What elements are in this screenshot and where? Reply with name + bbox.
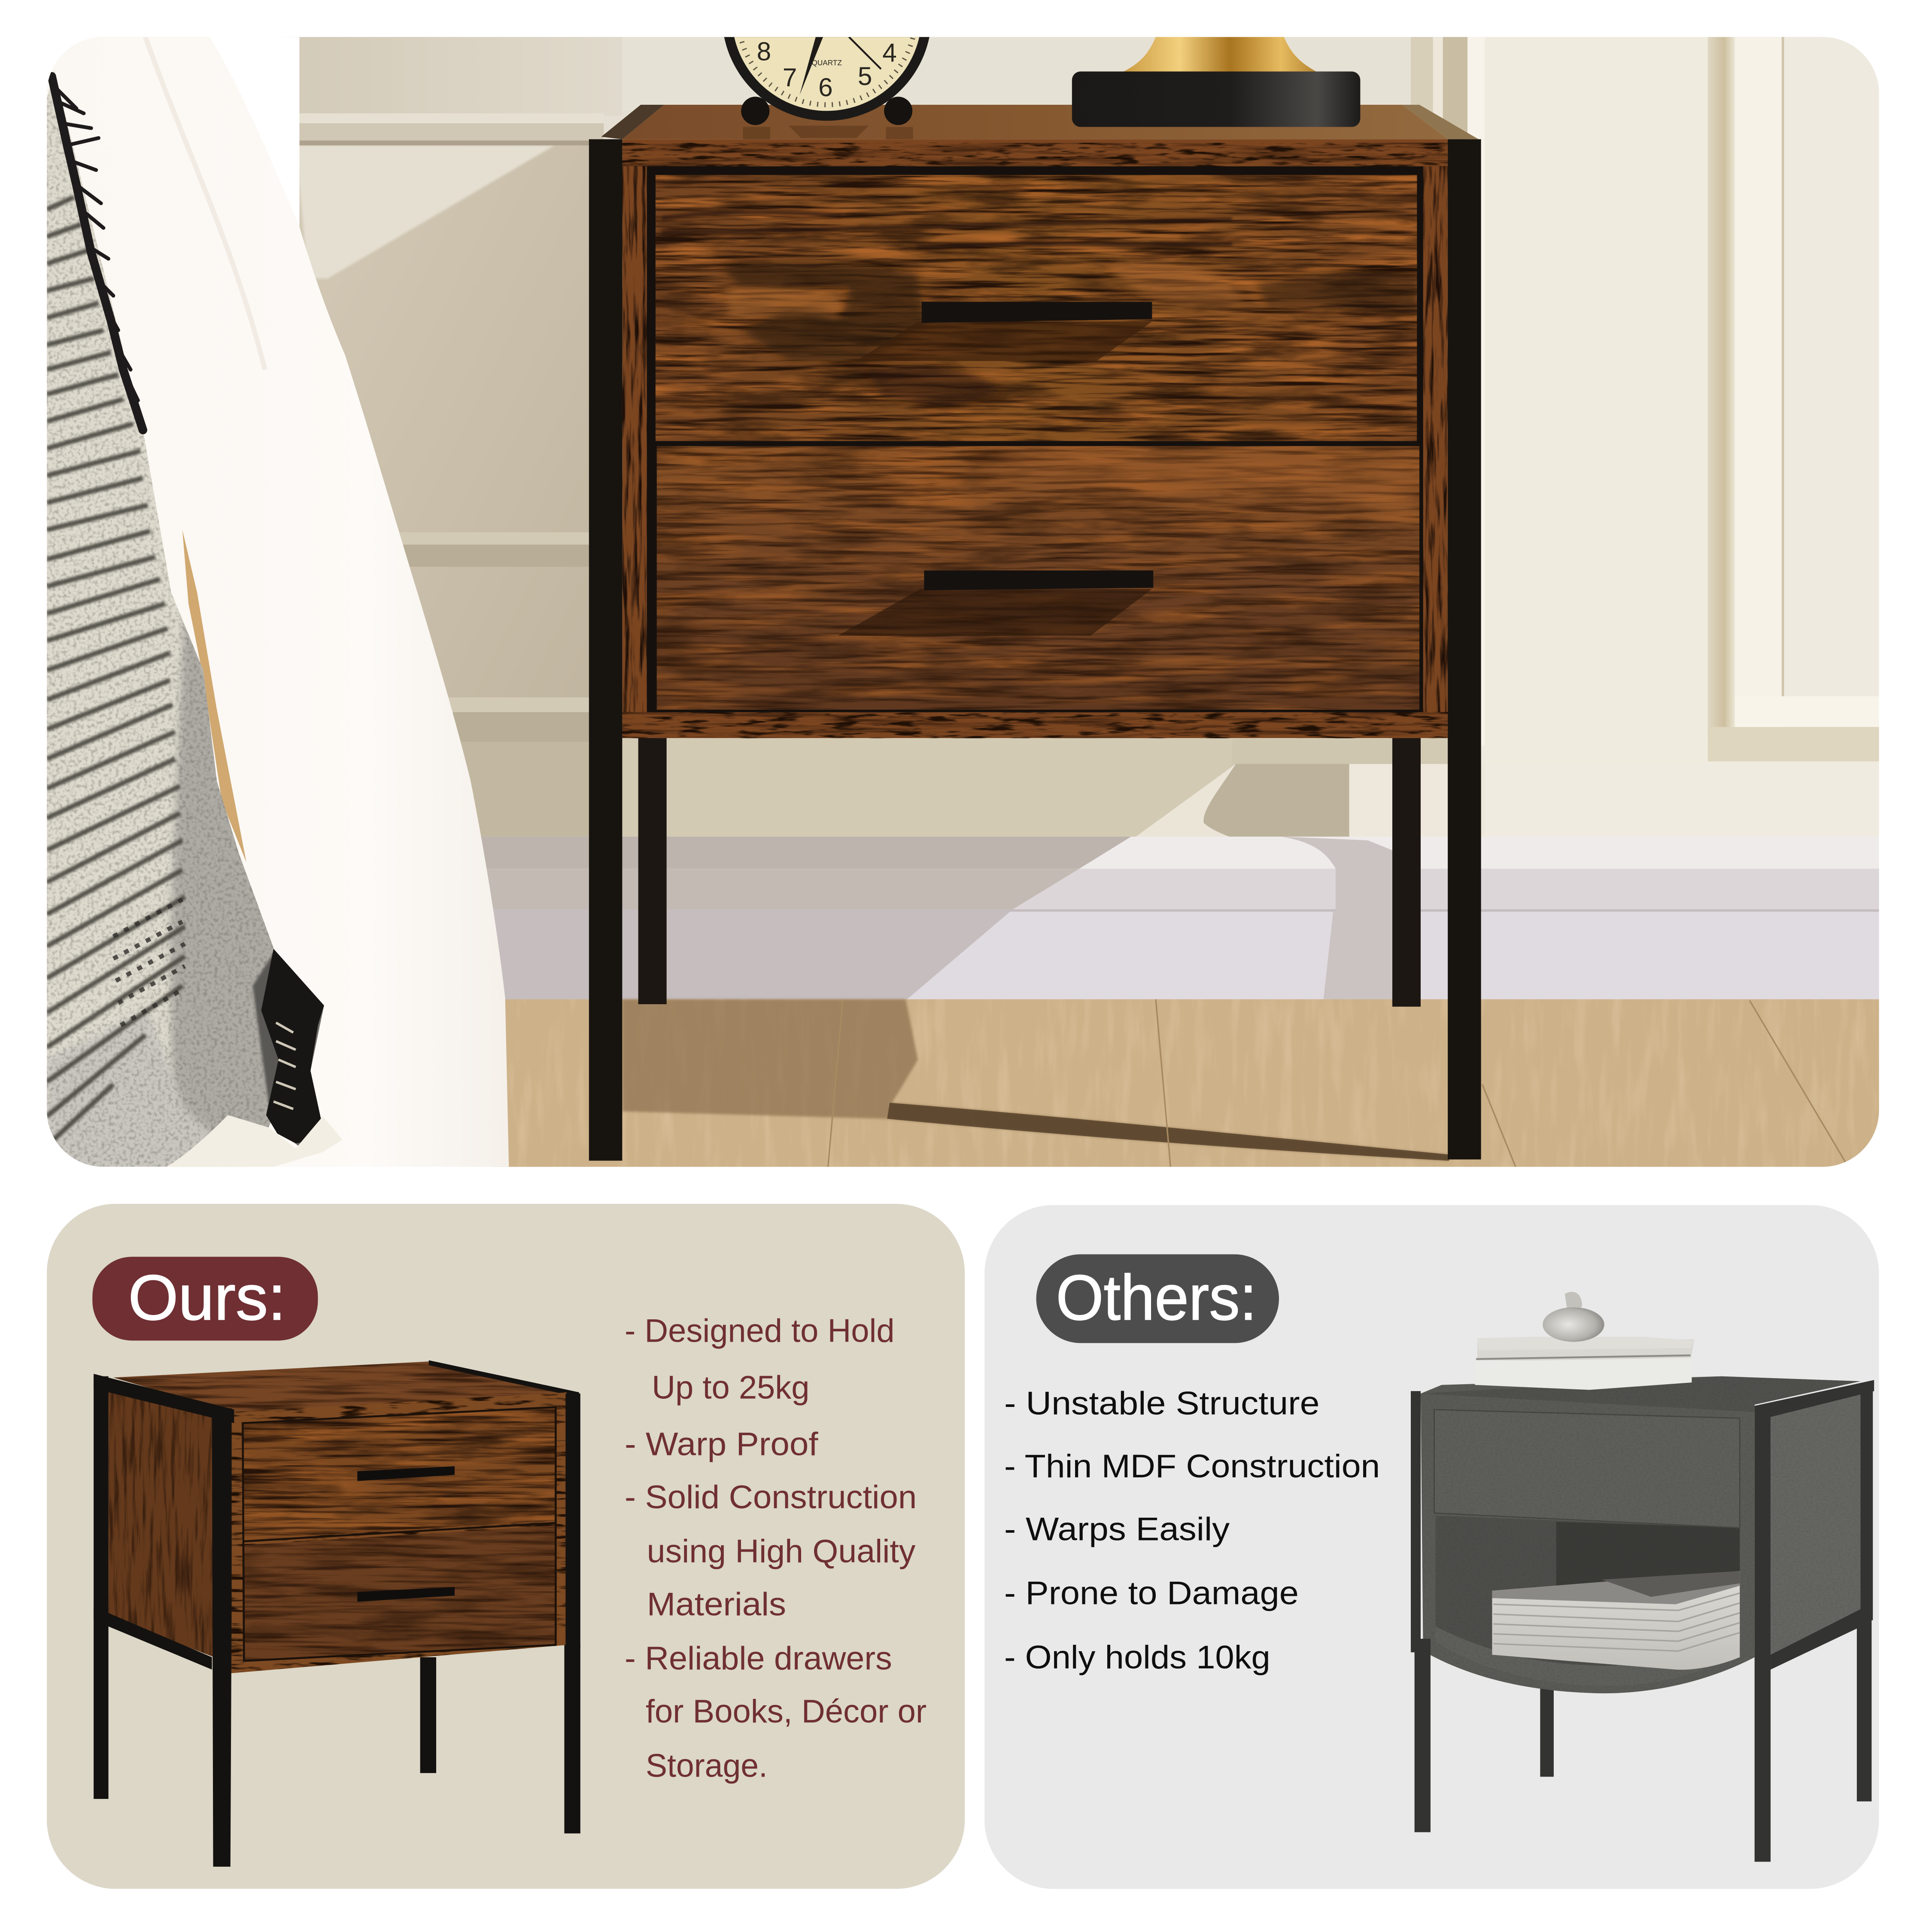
feature list: others	[1004, 1385, 1380, 1676]
books on top	[1475, 1337, 1694, 1390]
table clock: 8	[757, 37, 771, 66]
feature list: others: - Prone to Damage	[1004, 1575, 1299, 1612]
drawer front	[1434, 1410, 1740, 1528]
feature list: ours: for Books, Décor or	[646, 1693, 927, 1730]
heading: ours	[92, 1257, 318, 1340]
table clock	[722, 0, 932, 125]
upper drawer	[243, 1407, 556, 1540]
skirting board	[456, 837, 1885, 1000]
back leg	[1540, 1682, 1554, 1777]
feature list: ours: - Designed to Hold	[625, 1312, 895, 1349]
magazines on shelf	[1492, 1571, 1740, 1670]
back legs	[94, 1610, 436, 1799]
feature list: ours	[625, 1312, 927, 1784]
cabinet body	[1411, 1374, 1879, 1700]
feature list: ours: Up to 25kg	[652, 1369, 810, 1406]
metal frame	[1411, 1380, 1874, 1862]
drawer bottom	[657, 446, 1419, 710]
feature list: ours: Materials	[647, 1586, 786, 1622]
feature list: ours: using High Quality	[647, 1533, 915, 1570]
wall beneath nightstand	[623, 738, 1448, 837]
handle shadow	[838, 589, 1152, 636]
feature list: ours: Storage.	[646, 1747, 768, 1784]
table clock: 6	[818, 73, 833, 102]
side panel	[106, 1388, 219, 1661]
feature list: others: - Thin MDF Construction	[1004, 1448, 1380, 1485]
front legs	[589, 139, 1481, 1160]
heading: others: Others:	[1056, 1262, 1257, 1334]
back legs	[638, 738, 1421, 1007]
interior opening	[1435, 1516, 1740, 1686]
handle shadow	[857, 322, 1152, 361]
panel: lifestyle photo of nightstand	[47, 0, 1885, 1172]
image: grey nightstand	[1411, 1292, 1879, 1862]
side panel	[1771, 1391, 1862, 1657]
wood floor	[493, 999, 1885, 1172]
nightstand	[589, 105, 1481, 1160]
table lamp	[1072, 37, 1360, 127]
feature list: ours: - Solid Construction	[625, 1479, 917, 1516]
drawer top	[656, 175, 1417, 441]
panel: ours	[47, 1204, 965, 1889]
heading: ours: Ours:	[128, 1262, 286, 1334]
feature list: others: - Unstable Structure	[1004, 1385, 1320, 1422]
feature list: others: - Warps Easily	[1004, 1511, 1230, 1547]
nightstand top surface	[622, 105, 1448, 139]
white blanket	[47, 37, 509, 1167]
table clock: 5	[858, 61, 872, 91]
drawer outlines	[243, 1407, 556, 1661]
wall mouldings	[299, 37, 1879, 762]
table clock: 7	[783, 63, 797, 92]
feature list: ours: - Reliable drawers	[625, 1640, 892, 1677]
feature list: ours: - Warp Proof	[625, 1426, 819, 1462]
top surface	[109, 1361, 571, 1417]
lower drawer	[244, 1525, 556, 1661]
image: wooden nightstand	[94, 1360, 580, 1867]
drawer handles	[922, 302, 1153, 590]
clock reflection	[743, 126, 913, 139]
black frame	[94, 1374, 580, 1867]
handles	[357, 1466, 455, 1602]
table clock: QUARTZ	[811, 58, 842, 67]
table clock: 4	[882, 38, 897, 67]
feature list: others: - Only holds 10kg	[1004, 1639, 1270, 1676]
vase	[1543, 1292, 1604, 1342]
tan inner edge of blanket	[182, 530, 246, 863]
striped throw	[47, 37, 343, 1170]
black fringe	[52, 76, 143, 430]
front frame	[231, 1392, 568, 1676]
wall	[47, 37, 1879, 850]
panel: others	[984, 1205, 1879, 1889]
top face	[1421, 1376, 1861, 1412]
heading: others	[1036, 1255, 1279, 1343]
carcass front frame	[622, 139, 1448, 738]
